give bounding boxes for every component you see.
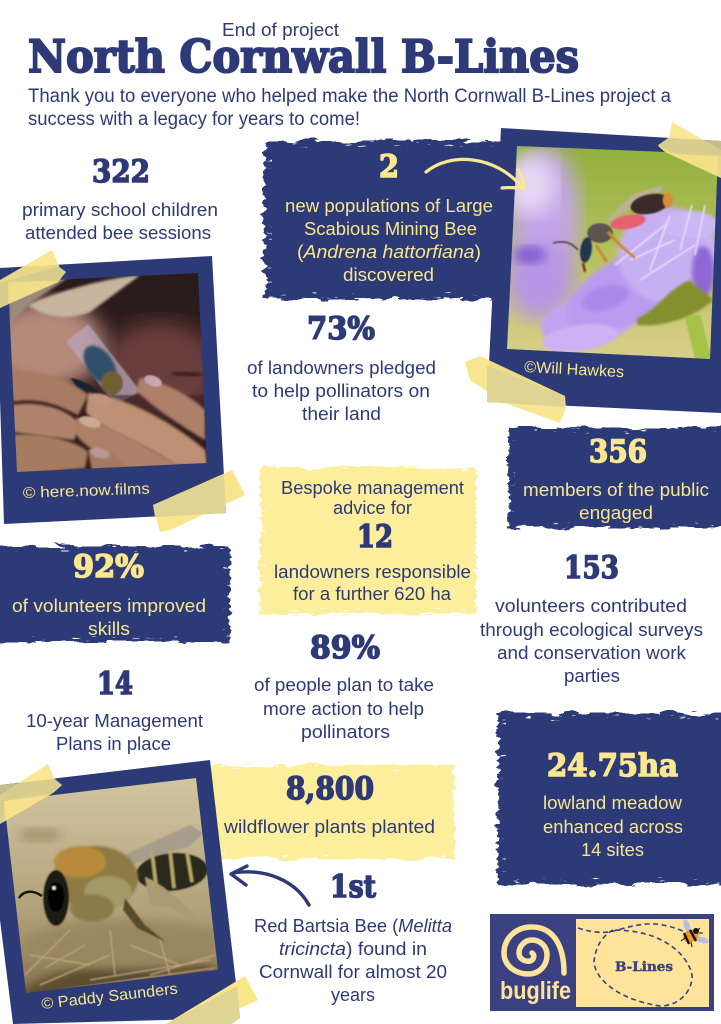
stat: 14 plans: 10-year Management bbox=[26, 711, 203, 731]
tape: bottom right bbox=[153, 470, 245, 532]
stat: 153 volunteers: parties bbox=[564, 666, 620, 686]
buglife wordmark: buglife bbox=[500, 977, 571, 1005]
stat: 322 children: primary school children bbox=[22, 200, 218, 220]
stat: 2 new populations: discovered bbox=[343, 265, 434, 285]
arrow: yellow curve to bee photo bbox=[426, 159, 524, 188]
stat: 92% volunteers: of volunteers improved bbox=[12, 596, 206, 616]
stat: 1st Red Bartsia Bee bbox=[254, 869, 452, 1005]
photo: red bartsia bee bbox=[0, 760, 258, 1024]
stat: 12 landowners: landowners responsible bbox=[274, 562, 471, 582]
stat: 12 landowners bbox=[274, 478, 471, 604]
stat: 153 volunteers: through ecological surveys bbox=[480, 620, 703, 640]
stat: 73% landowners: their land bbox=[302, 404, 381, 424]
tape: top left bbox=[0, 764, 62, 824]
panel: bespoke advice bbox=[260, 468, 476, 614]
stat: 1st Red Bartsia Bee: Red Bartsia Bee (Melitta bbox=[254, 916, 452, 936]
main title: North Cornwall B-Lines bbox=[28, 30, 579, 83]
dashed flight path bbox=[578, 924, 692, 1006]
tape: bottom right bbox=[166, 976, 258, 1024]
intro text: success with a legacy for years to come! bbox=[28, 109, 360, 130]
kicker: End of project bbox=[222, 20, 339, 40]
photo: bee on scabious bbox=[465, 122, 721, 423]
photo credit: here.now.films: © here.now.films bbox=[23, 481, 150, 502]
B-Lines wordmark: B-Lines bbox=[615, 960, 673, 975]
title block bbox=[28, 20, 579, 83]
stat: 73% landowners bbox=[247, 311, 436, 424]
stat: 356 members: engaged bbox=[579, 503, 653, 523]
stat: 322 children: attended bee sessions bbox=[25, 223, 211, 243]
stat: 8,800 plants bbox=[223, 771, 435, 837]
stat: 89% people bbox=[254, 630, 434, 742]
photo: hands with specimen tube bbox=[0, 250, 245, 532]
stat: 2 new populations: 2 bbox=[379, 149, 399, 185]
panel: 356 members bbox=[508, 428, 721, 528]
stat: 24.75ha: lowland meadow bbox=[543, 793, 683, 813]
stat: 2 new populations: new populations of Large bbox=[285, 196, 493, 216]
stat: 24.75ha: enhanced across bbox=[543, 817, 683, 837]
black antenna bbox=[19, 892, 42, 898]
intro text bbox=[28, 86, 671, 130]
stat: 73% landowners: of landowners pledged bbox=[247, 358, 436, 378]
stat: 356 members: 356 bbox=[589, 434, 647, 470]
panel: 8,800 plants bbox=[205, 765, 454, 859]
stat: 8,800 plants: 8,800 bbox=[286, 771, 374, 807]
stat: 24.75ha bbox=[543, 748, 683, 860]
photo credit: Will Hawkes: ©Will Hawkes bbox=[524, 359, 625, 381]
stat: 12 landowners: advice for bbox=[333, 498, 412, 518]
stat: 14 plans: Plans in place bbox=[56, 734, 171, 754]
stat: 14 plans: 14 bbox=[97, 666, 133, 702]
stat: 153 volunteers bbox=[480, 550, 703, 686]
stat: 89% people: more action to help bbox=[263, 699, 424, 719]
tape: bottom left bbox=[465, 356, 566, 423]
stat: 1st Red Bartsia Bee: 1st bbox=[330, 869, 377, 905]
stat: 12 landowners: 12 bbox=[357, 519, 393, 555]
stat: 92% volunteers bbox=[12, 549, 206, 639]
stat: 1st Red Bartsia Bee: years bbox=[331, 985, 375, 1005]
stat: 356 members: members of the public bbox=[523, 480, 709, 500]
stat: 12 landowners: for a further 620 ha bbox=[293, 584, 452, 604]
stat: 1st Red Bartsia Bee: tricincta ) found in bbox=[279, 939, 427, 959]
stat: 322 children bbox=[22, 154, 218, 243]
panel: 92% volunteers bbox=[0, 546, 230, 642]
stat: 89% people: of people plan to take bbox=[254, 675, 434, 695]
stat: 153 volunteers: 153 bbox=[564, 550, 619, 586]
stat: 153 volunteers: and conservation work bbox=[497, 643, 687, 663]
logo: buglife and B-Lines bbox=[490, 914, 714, 1011]
stat: 356 members bbox=[523, 434, 709, 523]
arrow: navy curve to bee photo bbox=[231, 866, 309, 905]
stat: 73% landowners: to help pollinators on bbox=[252, 381, 430, 401]
stat: 24.75ha: 24.75ha bbox=[547, 748, 678, 784]
stat: 89% people: 89% bbox=[310, 630, 380, 666]
icon: buglife spiral bbox=[504, 927, 564, 974]
stat: 92% volunteers: 92% bbox=[73, 549, 144, 585]
stat: 24.75ha: 14 sites bbox=[581, 840, 644, 860]
stat: 2 new populations bbox=[285, 149, 493, 285]
stat: 8,800 plants: wildflower plants planted bbox=[223, 817, 435, 837]
stat: 14 plans bbox=[26, 666, 203, 754]
panel: 2 new populations bbox=[264, 141, 516, 299]
stat: 1st Red Bartsia Bee: Cornwall for almost 20 bbox=[259, 962, 447, 982]
stat: 2 new populations: Scabious Mining Bee bbox=[304, 219, 477, 239]
panel: 24.75ha bbox=[498, 713, 721, 885]
photo credit: Paddy Saunders: © Paddy Saunders bbox=[41, 981, 179, 1013]
stat: 2 new populations: (Andrena hattorfiana ) bbox=[297, 242, 481, 262]
tape: top right bbox=[658, 122, 721, 178]
intro text: Thank you to everyone who helped make the North Cornwall B-Lines project a bbox=[28, 86, 671, 107]
stat: 92% volunteers: skills bbox=[88, 619, 130, 639]
stat: 322 children: 322 bbox=[92, 154, 150, 190]
icon: bumblebee bbox=[681, 918, 710, 947]
stat: 12 landowners: Bespoke management bbox=[281, 478, 464, 498]
stat: 73% landowners: 73% bbox=[307, 311, 375, 347]
stat: 153 volunteers: volunteers contributed bbox=[495, 596, 687, 616]
stat: 89% people: pollinators bbox=[301, 722, 390, 742]
tape: top left bbox=[0, 250, 66, 308]
